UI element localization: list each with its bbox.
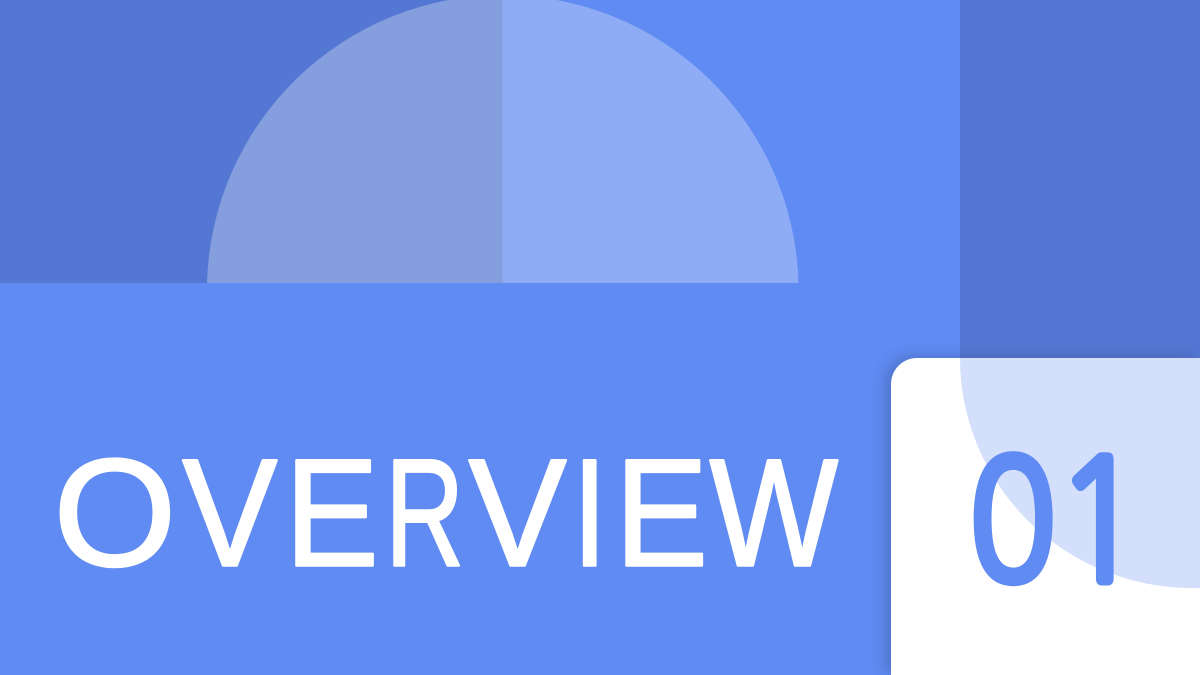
title: R [385, 430, 464, 598]
pale quarter circle on card [960, 358, 1200, 588]
section number: 1 [1054, 438, 1146, 606]
title [53, 430, 839, 598]
title: O [53, 430, 176, 598]
section number: 0 [968, 438, 1057, 606]
section number [968, 438, 1146, 606]
title: I [572, 430, 607, 598]
white card [891, 358, 1200, 675]
title: E [285, 430, 379, 598]
panel: right dark column [960, 0, 1200, 360]
title: E [615, 430, 708, 598]
panel: top left dark block [0, 0, 502, 283]
title: V [182, 430, 277, 598]
title: W [710, 430, 838, 598]
semicircle shape [207, 0, 798, 283]
title: V [469, 430, 567, 598]
